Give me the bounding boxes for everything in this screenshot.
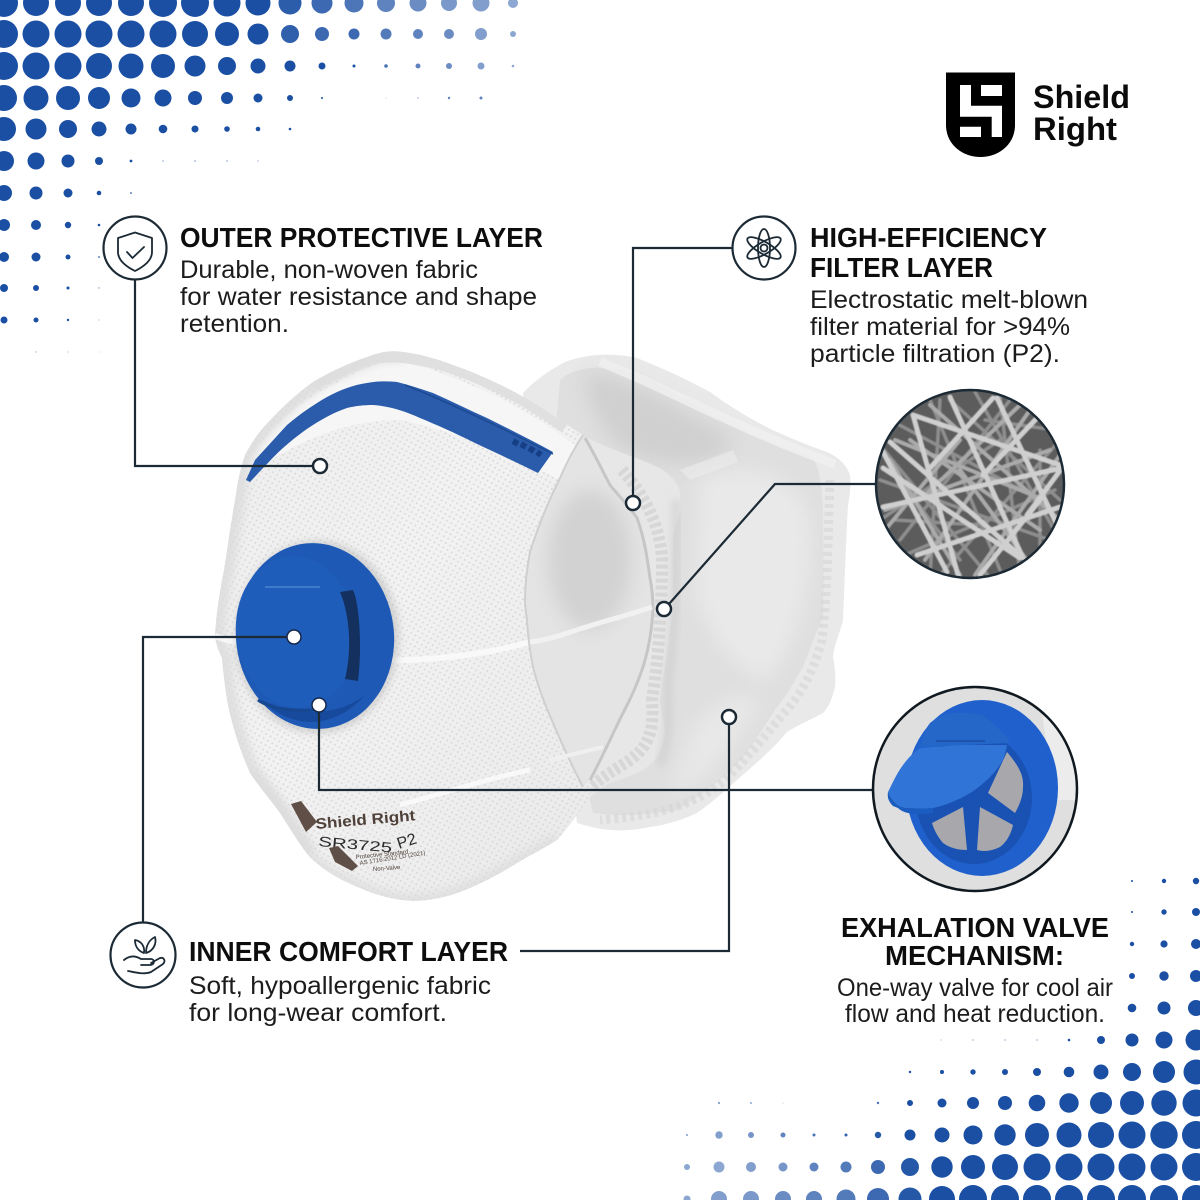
mask print text: P2 [395, 831, 419, 853]
icon: molecular filter [732, 216, 796, 280]
heading [810, 222, 1047, 283]
description [189, 972, 491, 1027]
heading: FILTER LAYER [810, 252, 993, 283]
description [810, 286, 1088, 368]
description: particle filtration (P2). [810, 340, 1060, 368]
mask print text: AS 1716:2012 LD (2021) [359, 851, 426, 867]
description: Electrostatic melt-blown [810, 286, 1088, 314]
heading: MECHANISM: [885, 940, 1064, 971]
icon: shield logo mark [946, 72, 1015, 157]
mask print text: Non-Valve [373, 865, 401, 873]
logo wordmark: Right [1033, 111, 1117, 147]
valve flap [888, 745, 1007, 809]
blue nose band [246, 381, 553, 482]
callout: high-efficiency filter layer [732, 216, 1088, 368]
middle filter layer edge [560, 432, 681, 797]
soft shadow behind cavity edge [660, 500, 676, 765]
filter fibres microscope circle [876, 390, 1064, 578]
heading: OUTER PROTECTIVE LAYER [180, 222, 543, 253]
description: retention. [180, 310, 289, 338]
heading: INNER COMFORT LAYER [189, 936, 508, 967]
description: One-way valve for cool air [837, 974, 1113, 1002]
callout: outer protective layer [104, 216, 543, 338]
halftone dots: top left [0, 0, 518, 353]
valve hinge dome [926, 720, 1006, 746]
description [837, 974, 1113, 1028]
blue exhalation valve [227, 535, 403, 737]
icon: hand with leaves [110, 922, 176, 988]
logo wordmark: Shield [1033, 79, 1130, 115]
valve outer ring [906, 700, 1058, 876]
mask print text: SR3725 [318, 833, 393, 855]
printed brand mark [291, 801, 317, 832]
callout: exhalation valve mechanism [837, 912, 1113, 1028]
icon: shield with check [104, 216, 166, 280]
description: Soft, hypoallergenic fabric [189, 972, 491, 1000]
description: Durable, non-woven fabric [180, 256, 478, 284]
mask print text: Protective Standard [356, 850, 409, 861]
mask print text [291, 801, 426, 873]
description: flow and heat reduction. [845, 1000, 1105, 1028]
valve detail circle [873, 685, 1080, 895]
heading: HIGH-EFFICIENCY [810, 222, 1047, 253]
description [180, 256, 537, 338]
front mask shell [210, 345, 610, 905]
valve mesh wedges [932, 752, 1023, 851]
leader lines and markers [135, 248, 876, 951]
description: for long-wear comfort. [189, 999, 447, 1027]
callout: inner comfort layer [110, 922, 508, 1027]
semi-transparent filter lens section [525, 435, 653, 787]
logo: Shield Right [946, 72, 1130, 157]
valve shadow on fabric [235, 541, 399, 733]
halftone dots: bottom right [684, 878, 1200, 1200]
back mask shell [523, 355, 850, 830]
description: for water resistance and shape [180, 283, 537, 311]
description: filter material for >94% [810, 313, 1070, 341]
logo wordmark [1033, 79, 1130, 147]
heading [841, 912, 1109, 971]
heading: EXHALATION VALVE [841, 912, 1109, 943]
mask print text: Shield Right [315, 807, 416, 833]
illustration: P2 respirator mask [210, 345, 850, 905]
